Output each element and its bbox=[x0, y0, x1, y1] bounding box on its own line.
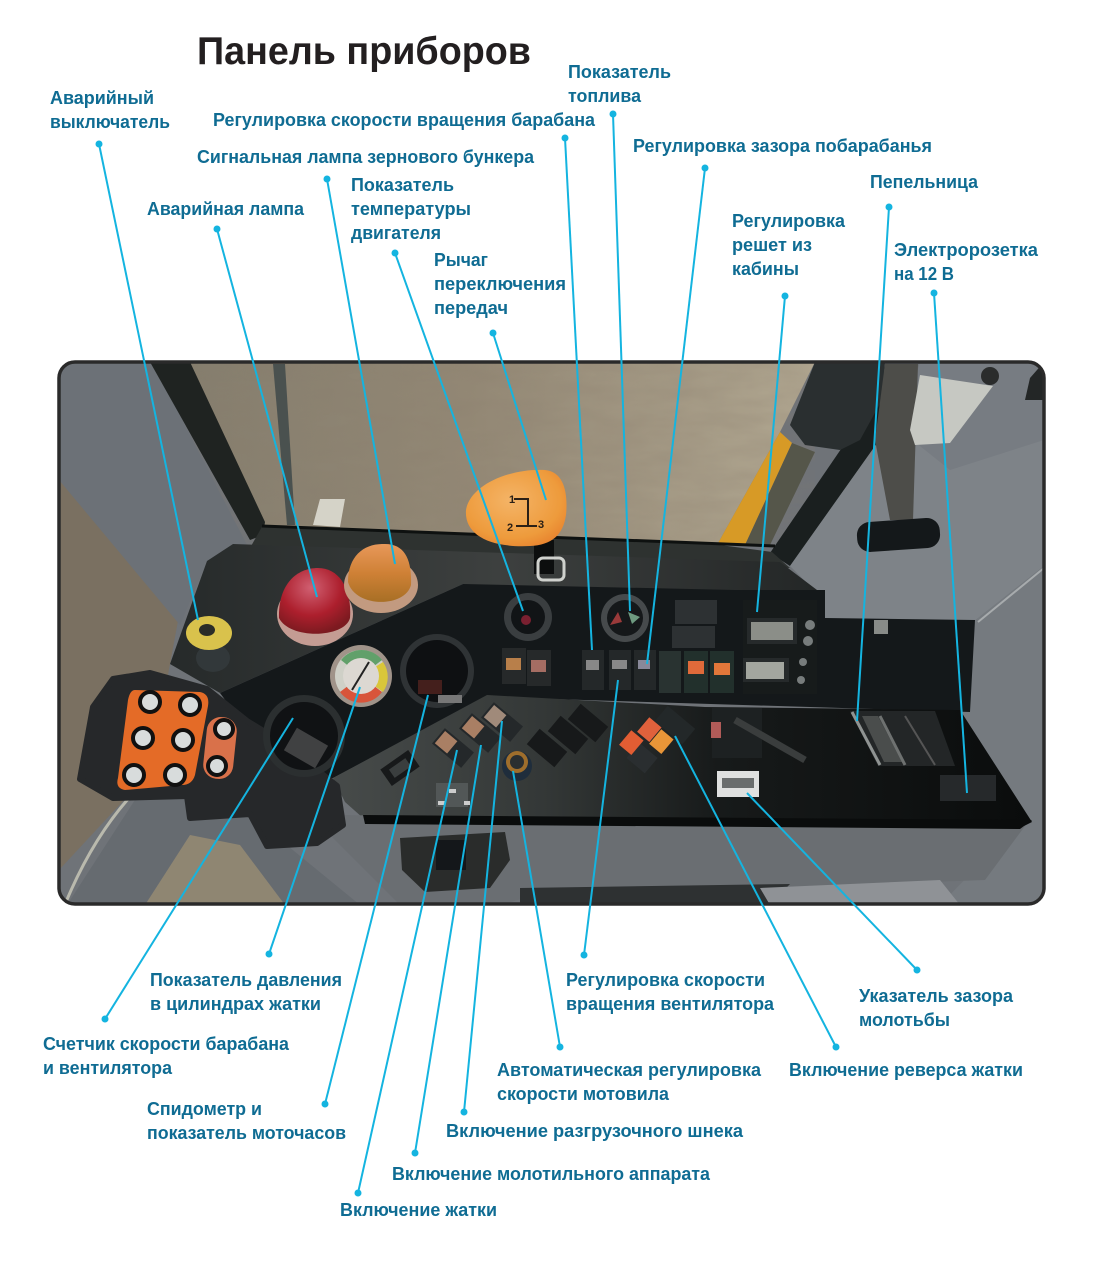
under dash strip bbox=[520, 884, 790, 902]
white bracket bbox=[910, 375, 993, 445]
upper right dark bracket bbox=[790, 362, 885, 450]
yellow post bbox=[717, 432, 792, 545]
callout line: gap indicator bbox=[747, 793, 920, 974]
callout line: fuel bbox=[610, 110, 630, 611]
ashtray bbox=[850, 711, 955, 766]
label: gear lever: Рычаг bbox=[434, 250, 488, 270]
digital displays bbox=[743, 600, 817, 694]
label: fuel gauge: топлива bbox=[568, 86, 642, 106]
lower left floor bbox=[70, 800, 356, 902]
callout line: drum speed bbox=[562, 134, 592, 650]
label: power socket: Электророзетка bbox=[894, 240, 1039, 260]
label: gap indicator: молотьбы bbox=[859, 1010, 950, 1030]
handle grip bbox=[856, 517, 941, 553]
callout line: engine temperature bbox=[392, 250, 523, 611]
speedometer gauge bbox=[400, 634, 474, 708]
small peg bbox=[874, 620, 888, 634]
label: power socket: на 12 В bbox=[894, 264, 954, 284]
label: reel speed: скорости мотовила bbox=[497, 1084, 670, 1104]
label: header pressure bbox=[150, 970, 342, 1014]
callout line: emergency switch bbox=[96, 140, 198, 620]
right upper grey panel bbox=[790, 432, 1044, 622]
callout line: sieve adjustment bbox=[757, 292, 788, 612]
callout line: concave clearance bbox=[647, 164, 708, 664]
instrument panel bbox=[220, 584, 975, 790]
panel: dashboard photo bbox=[59, 362, 1044, 905]
label: speedometer bbox=[147, 1099, 346, 1143]
upper control plate bbox=[170, 544, 825, 693]
left grey pillar bbox=[60, 472, 232, 622]
fuel gauge bbox=[601, 594, 649, 642]
label: sieve adjustment bbox=[732, 211, 846, 279]
reel speed knob bbox=[502, 751, 532, 781]
callout line: grain tank lamp bbox=[324, 176, 395, 564]
label: gear lever: передач bbox=[434, 298, 508, 318]
label: speedometer: показатель моточасов bbox=[147, 1123, 346, 1143]
joystick bbox=[80, 673, 343, 846]
label: drum counter: Счетчик скорости барабана bbox=[43, 1034, 290, 1054]
window bottom frame bbox=[250, 525, 790, 568]
paper note bbox=[313, 499, 345, 527]
label: grain tank lamp: Сигнальная лампа зернового бункера bbox=[197, 147, 535, 167]
label: gear lever: переключения bbox=[434, 274, 566, 294]
label: gap indicator bbox=[859, 986, 1014, 1030]
ground seen through window bbox=[185, 362, 815, 545]
label: sieve adjustment: кабины bbox=[732, 259, 799, 279]
callout line: unloading auger bbox=[460, 721, 502, 1116]
label: drum counter bbox=[43, 1034, 290, 1078]
callout line: header on bbox=[354, 750, 457, 1196]
foot bracket bbox=[400, 832, 510, 892]
right lower grey panel bbox=[940, 566, 1044, 905]
lower deck bbox=[333, 695, 1032, 828]
emergency stop button bbox=[186, 616, 232, 672]
white deck labels bbox=[436, 783, 470, 807]
label: drum speed adjustment: Регулировка скорости вращения барабана bbox=[213, 110, 596, 130]
label: ashtray: Пепельница bbox=[870, 172, 979, 192]
label: sieve adjustment: решет из bbox=[732, 235, 812, 255]
left black window frame bbox=[150, 362, 265, 540]
label: threshing: Включение молотильного аппарата bbox=[392, 1164, 711, 1184]
label: fan speed: Регулировка скорости bbox=[566, 970, 765, 990]
label: sieve adjustment: Регулировка bbox=[732, 211, 846, 231]
label: engine temperature: температуры bbox=[351, 199, 471, 219]
right dark frame bbox=[770, 404, 880, 566]
label: header reverse: Включение реверса жатки bbox=[789, 1060, 1023, 1080]
callout lines bbox=[96, 110, 967, 1196]
callout line: emergency lamp bbox=[214, 226, 317, 597]
label: emergency switch: Аварийный bbox=[50, 88, 154, 108]
gear knob bbox=[466, 470, 567, 546]
ground outside left window bbox=[59, 470, 180, 870]
callout line: socket bbox=[930, 290, 967, 793]
callout line: threshing bbox=[412, 745, 481, 1156]
callout line: gear lever bbox=[490, 330, 546, 500]
label: header pressure: в цилиндрах жатки bbox=[150, 994, 321, 1014]
blank dark blocks bbox=[672, 600, 717, 648]
label: fan speed: вращения вентилятора bbox=[566, 994, 775, 1014]
callout line: fan speed bbox=[580, 680, 618, 958]
gear knob: 2 bbox=[507, 522, 513, 534]
label: engine temperature: Показатель bbox=[351, 175, 454, 195]
joystick main pad bbox=[117, 690, 208, 790]
title: Панель приборов bbox=[197, 30, 531, 73]
label: speedometer: Спидометр и bbox=[147, 1099, 262, 1119]
gear knob: 1 bbox=[509, 494, 515, 506]
ignition key bbox=[711, 708, 805, 760]
label: reel speed: Автоматическая регулировка bbox=[497, 1060, 762, 1080]
front grey dash bbox=[360, 815, 1024, 880]
label: header pressure: Показатель давления bbox=[150, 970, 342, 990]
handle strip bbox=[875, 364, 918, 520]
deck rocker switches bbox=[380, 702, 695, 786]
label: fan speed bbox=[566, 970, 775, 1014]
red lamp bbox=[277, 568, 353, 646]
label: reel speed bbox=[497, 1060, 762, 1104]
callout line: header reverse bbox=[675, 736, 840, 1050]
label: fuel gauge: Показатель bbox=[568, 62, 671, 82]
orange deck buttons bbox=[619, 717, 674, 755]
concave gap label bbox=[717, 771, 759, 797]
label: concave clearance: Регулировка зазора побарабанья bbox=[633, 136, 932, 156]
label: gap indicator: Указатель зазора bbox=[859, 986, 1014, 1006]
label: engine temperature: двигателя bbox=[351, 223, 441, 243]
callout line: header pressure bbox=[266, 687, 360, 958]
joystick side pad bbox=[203, 717, 237, 779]
callout line: speedometer bbox=[322, 695, 428, 1108]
callout line: ashtray bbox=[857, 204, 892, 721]
callout line: drum counter bbox=[102, 718, 293, 1022]
label: emergency switch bbox=[50, 88, 170, 132]
window rod bbox=[273, 364, 295, 525]
engine temperature gauge bbox=[504, 593, 552, 641]
label: gear lever bbox=[434, 250, 566, 318]
label: header on: Включение жатки bbox=[340, 1200, 497, 1220]
floor trim highlight bbox=[66, 800, 129, 900]
callout line: reel speed bbox=[513, 771, 564, 1050]
12V socket bbox=[940, 775, 996, 801]
label: engine temperature bbox=[351, 175, 471, 243]
deck shadow bbox=[363, 815, 1032, 829]
label: unloading auger: Включение разгрузочного шнека bbox=[446, 1121, 744, 1141]
label: emergency switch: выключатель bbox=[50, 112, 170, 132]
label: fuel gauge bbox=[568, 62, 671, 106]
upper switches row bbox=[502, 648, 734, 693]
label: emergency lamp: Аварийная лампа bbox=[147, 199, 305, 219]
pressure gauge bbox=[330, 645, 392, 707]
joystick buttons bbox=[124, 692, 233, 785]
gear knob: 3 bbox=[538, 519, 544, 531]
rotor speed counter bbox=[263, 695, 345, 777]
label: power socket bbox=[894, 240, 1039, 284]
label: drum counter: и вентилятора bbox=[43, 1058, 173, 1078]
amber lamp bbox=[344, 544, 418, 613]
gear lever stem bbox=[534, 540, 564, 580]
